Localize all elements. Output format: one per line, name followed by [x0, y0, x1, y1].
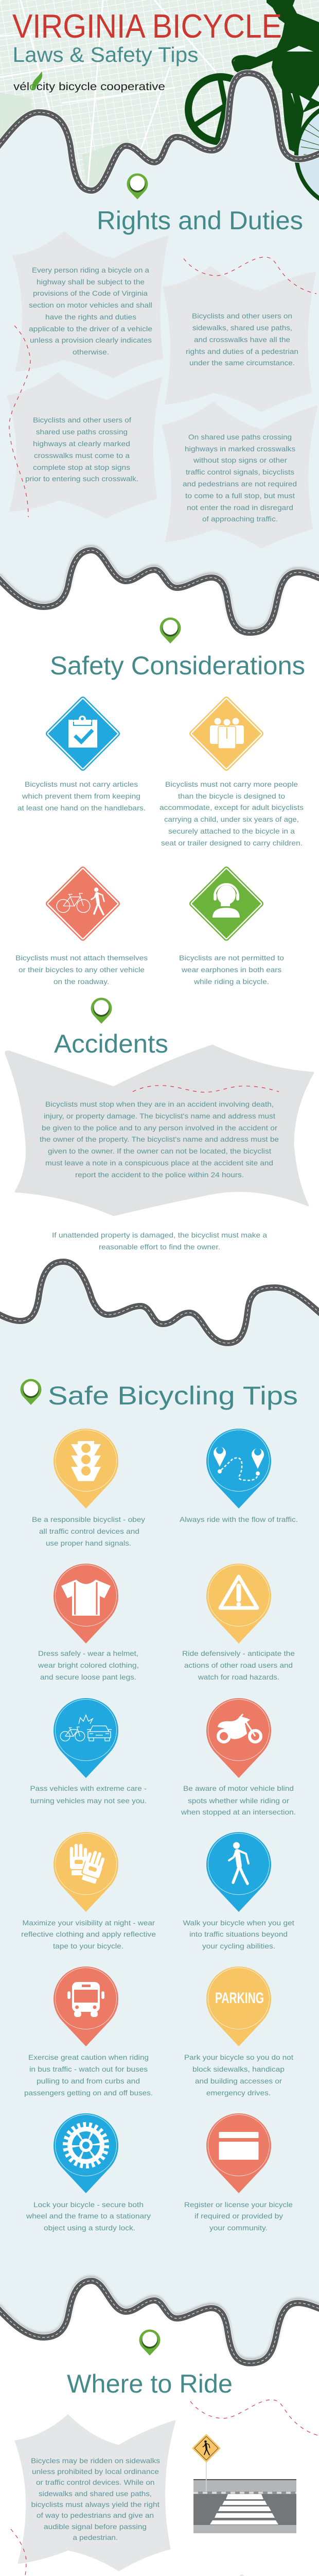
pin: accidents — [91, 998, 112, 1024]
heading: safe bicycling tips: Safe Bicycling Tips — [48, 1381, 298, 1410]
text: carry people: seat or trailer designed to carry children. — [161, 839, 303, 847]
panel: accidents — [6, 1045, 313, 1215]
text: carry people: accommodate, except for adult bicyclists — [160, 803, 304, 811]
pin: safety considerations — [160, 618, 181, 643]
text: crossing highways: complete stop at stop signs — [33, 463, 130, 471]
text: marked crosswalks: On shared use paths crossing — [188, 433, 292, 441]
road 4 — [0, 2279, 319, 2363]
text: pass vehicles — [30, 1784, 147, 1805]
text: bus traffic: pulling to and from curbs and — [37, 2077, 140, 2085]
text: carry people: than the bicycle is designed to — [178, 792, 285, 800]
text: accidents: report the accident to the police within 24 hours. — [75, 1171, 244, 1179]
text: flow of traffic: Always ride with the flow of traffic. — [180, 1515, 298, 1523]
text: carry people — [160, 780, 304, 847]
text: pass vehicles: Pass vehicles with extreme care - — [30, 1784, 147, 1792]
text: carry people: securely attached to the bicycle in a — [168, 827, 295, 835]
cyclist front wheel — [188, 77, 253, 144]
red dashed route: where to ride top — [190, 2400, 318, 2435]
text: sidewalks riding: sidewalks and shared use paths, — [39, 2489, 152, 2498]
subtitle: Laws & Safety Tips — [12, 43, 199, 66]
icon: clipboard diamond — [49, 700, 117, 768]
heading: accidents: Accidents — [54, 1029, 168, 1058]
header map background — [0, 0, 319, 206]
red dashed route: rights left — [9, 326, 30, 517]
text: blind spots: when stopped at an intersection. — [181, 1808, 296, 1816]
icon: parking pin — [206, 1967, 271, 2046]
text: sidewalks: rights and duties of a pedestrian — [186, 347, 298, 355]
icon: motorcycle pin — [206, 1698, 271, 1778]
white ground: where to ride section — [0, 2281, 319, 2576]
text: accidents: given to the owner. If the owner can not be located, the bicyclist — [48, 1147, 271, 1155]
text: lock your bicycle: Lock your bicycle - secure both — [33, 2200, 144, 2209]
text: crossing highways: prior to entering such crosswalk. — [25, 474, 138, 483]
text: walk your bicycle — [183, 1919, 294, 1950]
icon: traffic light pin — [54, 1429, 118, 1509]
text: sidewalks: Bicyclists and other users on — [192, 312, 292, 320]
text: every person: highway shall be subject to the — [37, 278, 145, 286]
red dashed route: accidents — [133, 1086, 279, 1092]
text: park your bicycle: block sidewalks, handicap — [192, 2065, 285, 2073]
text: carry articles — [17, 780, 146, 812]
text: blind spots — [181, 1784, 296, 1816]
text: earphones: wear earphones in both ears — [181, 965, 281, 974]
text: marked crosswalks: and pedestrians are not required — [183, 480, 297, 488]
text: sidewalks riding: audible signal before passing — [44, 2522, 147, 2531]
text: every person: have the rights and duties — [45, 313, 136, 321]
icon: bicycle and pedestrian diamond — [49, 870, 117, 938]
icon: gloves pin — [54, 1832, 118, 1912]
panel: marked crosswalks — [163, 402, 317, 548]
icon: bicycle and car crash pin — [54, 1698, 118, 1778]
heading: safety considerations: Safety Considerations — [50, 651, 305, 680]
text: every person: unless a provision clearly indicates — [30, 336, 152, 344]
text: visibility: tape to your bicycle. — [53, 1942, 123, 1950]
text: every person: section on motor vehicles and shall — [29, 301, 152, 309]
text: sidewalks riding: unless prohibited by local ordinance — [32, 2467, 159, 2476]
text: responsible bicyclist: all traffic control devices and — [39, 1527, 139, 1535]
text: every person: Every person riding a bicycle on a — [32, 266, 149, 274]
text: accidents: be given to the police and to any person involved in the accident or — [42, 1124, 277, 1132]
text: accidents: must leave a note in a conspicuous place at the accident site and — [45, 1159, 273, 1167]
text: bus traffic: Exercise great caution when riding — [28, 2053, 149, 2061]
text: ride defensively: actions of other road users and — [184, 1661, 293, 1669]
text: attach: Bicyclists must not attach themselves — [15, 954, 148, 962]
text: marked crosswalks: highways in marked crosswalks — [185, 445, 295, 453]
text: walk your bicycle: Walk your bicycle when you get — [183, 1919, 294, 1927]
text: attach: on the roadway. — [54, 977, 109, 986]
road 3 — [0, 1262, 319, 1343]
text: crossing highways: Bicyclists and other users of — [33, 416, 131, 424]
text: register: your community. — [209, 2224, 268, 2232]
text: carry articles: which prevent them from keeping — [22, 792, 140, 800]
icon: card pin — [206, 2113, 271, 2193]
text: visibility — [21, 1919, 156, 1950]
text: earphones: Bicyclists are not permitted to — [179, 954, 284, 962]
text: every person — [29, 266, 152, 356]
pin: where to ride — [139, 2330, 161, 2355]
text: register: if required or provided by — [194, 2212, 283, 2220]
light ground under the first road — [0, 73, 319, 216]
text: blind spots: spots whether while riding or — [188, 1797, 289, 1805]
cyclist silhouette — [232, 0, 319, 208]
text: bus traffic: passengers getting on and off buses. — [24, 2089, 153, 2097]
text: responsible bicyclist: use proper hand signals. — [46, 1539, 131, 1547]
icon: pedestrian pin — [206, 1832, 271, 1912]
text: lock your bicycle — [26, 2200, 151, 2232]
logo: velocity bicycle cooperative — [13, 72, 165, 93]
text: crossing highways: highways at clearly marked — [33, 439, 130, 448]
text: pass vehicles: turning vehicles may not see you. — [30, 1797, 147, 1805]
text: blind spots: Be aware of motor vehicle blind — [183, 1784, 294, 1792]
text: accidents: Bicyclists must stop when they are in an accident involving death, — [45, 1100, 274, 1108]
text: sidewalks riding: or traffic control devices. While on — [36, 2478, 154, 2486]
text: dress safely: wear bright colored clothing, — [38, 1661, 139, 1669]
text: lock your bicycle: wheel and the frame to a stationary — [26, 2212, 151, 2220]
text: lock your bicycle: object using a sturdy lock. — [44, 2224, 135, 2232]
text: visibility: reflective clothing and apply reflective — [21, 1930, 156, 1938]
text: ride defensively: watch for road hazards. — [198, 1673, 279, 1681]
text: sidewalks riding: a pedestrian. — [73, 2533, 118, 2541]
text: responsible bicyclist: Be a responsible bicyclist - obey — [32, 1515, 145, 1523]
text: accidents: the owner of the property. The bicyclist's name and address must be — [40, 1135, 279, 1143]
text: earphones — [179, 954, 284, 986]
panel: every person — [13, 232, 168, 378]
road 1 — [0, 73, 319, 191]
icon: bus pin — [54, 1967, 118, 2046]
text: sidewalks: sidewalks, shared use paths, — [192, 324, 292, 332]
text: visibility: Maximize your visibility at night - wear — [23, 1919, 155, 1927]
text: marked crosswalks — [183, 433, 297, 523]
text: sidewalks riding: Bicycles may be ridden on sidewalks — [31, 2456, 160, 2465]
text: register: Register or license your bicycle — [184, 2200, 293, 2209]
icon: group of people diamond — [192, 700, 260, 768]
pin: rights and duties — [127, 174, 148, 199]
text: carry people: carrying a child, under six years of age, — [164, 815, 299, 823]
text: crossing highways: crosswalks must come to a — [34, 451, 130, 460]
text: marked crosswalks: without stop signs or other — [193, 456, 287, 464]
text: crossing highways: shared use paths crossing — [36, 428, 128, 436]
white ground: safety section — [0, 550, 319, 1350]
road 2 — [0, 549, 319, 633]
text: marked crosswalks: not enter the road in disregard — [187, 503, 293, 512]
text: bus traffic: in bus traffic - watch out for buses — [29, 2065, 148, 2073]
text: sidewalks: and crosswalks have all the — [194, 335, 290, 344]
panel: sidewalks riding — [15, 2415, 175, 2570]
text: dress safely: Dress safely - wear a helmet, — [38, 1649, 138, 1657]
blue ground: safe bicycling section — [0, 1262, 319, 2391]
red dashed route: where to ride left — [5, 2529, 26, 2576]
icon: parking pin: PARKING — [215, 1990, 264, 2007]
text: marked crosswalks: of approaching traffic. — [202, 515, 278, 523]
icon: t-shirt pin — [54, 1564, 118, 1643]
text: attach — [15, 954, 148, 986]
text: park your bicycle: Park your bicycle so you do not — [184, 2053, 293, 2061]
red dashed route: rights top — [184, 257, 316, 294]
icon: gear pin — [54, 2113, 118, 2193]
text: sidewalks riding: bicyclists must always yield the right — [31, 2500, 160, 2509]
text: unattended property: reasonable effort to find the owner. — [99, 1243, 220, 1251]
text: carry articles: at least one hand on the handlebars. — [17, 804, 146, 812]
pin: safe bicycling tips — [21, 1379, 41, 1405]
panel: sidewalks — [164, 267, 315, 411]
text: ride defensively — [182, 1649, 295, 1681]
text: unattended property — [52, 1231, 267, 1251]
text: dress safely — [38, 1649, 139, 1681]
text: register — [184, 2200, 293, 2232]
text: dress safely: and secure loose pant legs. — [40, 1673, 136, 1681]
heading: rights and duties: Rights and Duties — [97, 206, 303, 235]
text: crossing highways — [25, 416, 138, 483]
text: sidewalks riding: of way to pedestrians and give an — [37, 2511, 154, 2519]
text: walk your bicycle: into traffic situations beyond — [189, 1930, 288, 1938]
text: attach: or their bicycles to any other vehicle — [19, 965, 145, 974]
text: every person: applicable to the driver of a vehicle — [29, 325, 152, 333]
text: responsible bicyclist — [32, 1515, 145, 1547]
heading: where to ride: Where to Ride — [67, 2369, 233, 2398]
panel: crossing highways — [8, 373, 162, 518]
illustration: crosswalk with sign — [193, 2435, 296, 2533]
text: sidewalks: under the same circumstance. — [189, 359, 295, 367]
text: carry people: Bicyclists must not carry more people — [165, 780, 298, 788]
logo: velocity bicycle cooperative: vélocity bicycle cooperative — [13, 81, 165, 93]
icon: earphones diamond — [192, 870, 260, 938]
text: sidewalks — [186, 312, 298, 367]
text: park your bicycle — [184, 2053, 293, 2097]
text: accidents: injury, or property damage. The bicyclist's name and address must — [44, 1112, 275, 1120]
text: sidewalks riding — [31, 2456, 160, 2541]
text: every person: provisions of the Code of Virginia — [33, 289, 148, 297]
text: marked crosswalks: to come to a full stop, but must — [185, 492, 295, 500]
text: carry articles: Bicyclists must not carry articles — [25, 780, 138, 788]
text: park your bicycle: and building accesses or — [195, 2077, 282, 2085]
text: ride defensively: Ride defensively - anticipate the — [182, 1649, 295, 1657]
icon: route pin — [206, 1429, 271, 1509]
text: park your bicycle: emergency drives. — [206, 2089, 271, 2097]
text: every person: otherwise. — [73, 348, 109, 356]
text: accidents — [40, 1100, 279, 1179]
title: VIRGINIA BICYCLE — [12, 7, 282, 45]
text: earphones: while riding a bicycle. — [193, 977, 269, 986]
panel: helmet law — [134, 2575, 294, 2576]
text: bus traffic — [24, 2053, 153, 2097]
text: walk your bicycle: your cycling abilities. — [202, 1942, 275, 1950]
text: unattended property: If unattended property is damaged, the bicyclist must make a — [52, 1231, 267, 1239]
icon: warning pin — [206, 1564, 271, 1643]
text: marked crosswalks: traffic control signals, bicyclists — [186, 468, 294, 476]
